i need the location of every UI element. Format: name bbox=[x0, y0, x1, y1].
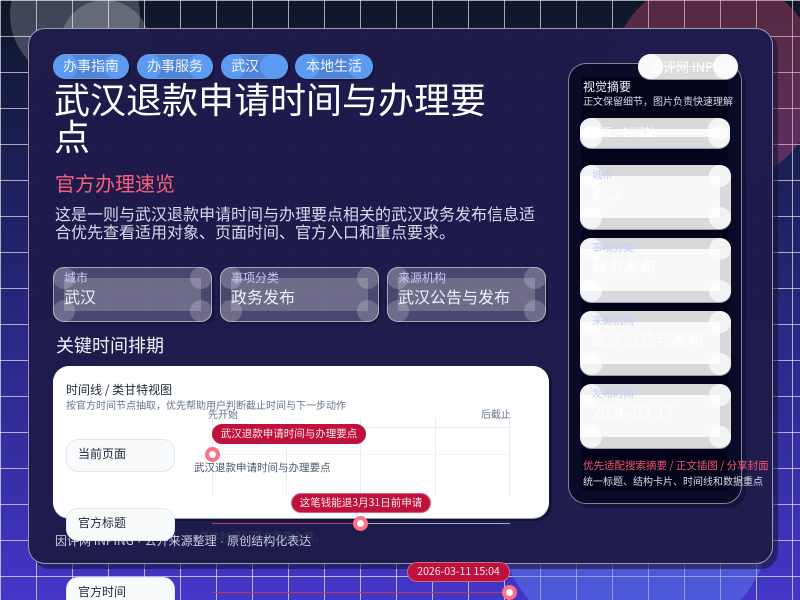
stat card: 城市: 武汉 bbox=[64, 284, 96, 308]
event pill 2: 这笔钱能退3月31日前申请 bbox=[300, 495, 422, 510]
title: 武汉退款申请时间与办理要点 bbox=[54, 72, 486, 161]
event dot 2 bbox=[353, 516, 368, 531]
info box: 城市: 武汉 bbox=[592, 180, 624, 204]
stat card: 事项分类: 政务发布 bbox=[231, 284, 295, 308]
side panel note: 统一标题、结构卡片、时间线和数据重点 bbox=[583, 473, 763, 488]
row label: 当前页面: 当前页面 bbox=[78, 445, 126, 462]
timeline subheading: 按官方时间节点抽取，优先帮助用户判断截止时间与下一步动作 bbox=[66, 397, 346, 412]
side panel bbox=[568, 63, 742, 504]
section heading: 关键时间排期 bbox=[56, 332, 164, 358]
footer note: 因评网 INPING · 公开来源整理 · 原创结构化表达 bbox=[55, 532, 311, 549]
template chip bbox=[580, 118, 730, 148]
stat card: 来源机构: 武汉公告与发布 bbox=[398, 284, 510, 308]
info box: 发布时间: 发布时间 bbox=[592, 386, 634, 401]
side panel heading: 视觉摘要 bbox=[583, 78, 631, 95]
axis label: start: 先开始 bbox=[208, 406, 238, 421]
info box: 事项分类: 政务发布 bbox=[592, 253, 656, 277]
row label: 官方时间: 官方时间 bbox=[78, 583, 126, 600]
tag: 办事指南 bbox=[53, 54, 129, 79]
decorative circle: top left large bbox=[10, 0, 140, 80]
tag: 本地生活: 本地生活 bbox=[306, 56, 362, 76]
subtitle: 官方办理速览 bbox=[55, 168, 175, 197]
stat card: 来源机构 bbox=[387, 267, 546, 322]
source pill bbox=[638, 54, 738, 79]
event pill 1 bbox=[212, 424, 366, 444]
template chip: 模版：时间轴 bbox=[590, 124, 656, 140]
info box: 城市: 城市 bbox=[592, 167, 613, 182]
tag: 办事服务 bbox=[137, 54, 213, 79]
timeline panel bbox=[53, 366, 549, 518]
tag: 办事指南: 办事指南 bbox=[63, 56, 119, 76]
row label: 官方标题: 官方标题 bbox=[78, 514, 126, 531]
decorative circle: bottom blue bbox=[496, 371, 774, 600]
event pill 1: 武汉退款申请时间与办理要点 bbox=[221, 426, 357, 441]
stat card: 事项分类 bbox=[220, 267, 379, 322]
tag: 武汉 bbox=[221, 54, 288, 79]
side panel subheading: 正文保留细节，图片负责快速理解 bbox=[583, 93, 733, 108]
stat card: 来源机构: 来源机构 bbox=[398, 269, 446, 286]
info box: 来源机构: 武汉公告与发布 bbox=[592, 326, 704, 350]
side panel accent text: 优先适配搜索摘要 / 正文插图 / 分享封面 bbox=[583, 458, 769, 473]
decorative circle: top right pink bbox=[610, 0, 800, 185]
description: 这是一则与武汉退款申请时间与办理要点相关的武汉政务发布信息适合优先查看适用对象、页面时间、官方入口和重点要求。 bbox=[55, 201, 535, 243]
event pill 3 bbox=[407, 562, 510, 582]
decorative circle: top left small bbox=[60, 0, 150, 90]
tag: 武汉: 武汉 bbox=[231, 56, 259, 76]
info box: 发布时间: 2026-03-17 bbox=[592, 399, 674, 423]
source pill: 因评网 INPING bbox=[650, 57, 736, 76]
tag: 本地生活 bbox=[295, 54, 373, 79]
row label: 官方标题 bbox=[66, 508, 175, 541]
event dot 3 bbox=[502, 585, 517, 600]
info box: 事项分类 bbox=[580, 238, 731, 302]
axis label: end: 后截止 bbox=[481, 406, 511, 421]
tag row bbox=[53, 54, 375, 81]
info box: 来源机构 bbox=[580, 311, 731, 375]
info box: 发布时间 bbox=[580, 384, 731, 448]
row label: 当前页面 bbox=[66, 439, 175, 472]
event pill 3: 2026-03-11 15:04 bbox=[417, 564, 500, 579]
stat card: 城市 bbox=[53, 267, 212, 322]
event caption 1: 武汉退款申请时间与办理要点 bbox=[194, 460, 330, 475]
info box: 来源机构: 来源机构 bbox=[592, 313, 634, 328]
timeline heading: 时间线 / 类甘特视图 bbox=[66, 381, 172, 398]
stat card: 城市: 城市 bbox=[64, 269, 88, 286]
row label: 官方时间 bbox=[66, 577, 175, 600]
tag: 办事服务: 办事服务 bbox=[147, 56, 203, 76]
row 3 line faint text: 具体时间以官方页面为准。 bbox=[199, 529, 325, 544]
stat card: 事项分类: 事项分类 bbox=[231, 269, 279, 286]
info box: 事项分类: 事项分类 bbox=[592, 240, 634, 255]
info box: 城市 bbox=[580, 165, 731, 229]
event pill 2 bbox=[291, 493, 431, 513]
event dot 1 bbox=[205, 447, 220, 462]
